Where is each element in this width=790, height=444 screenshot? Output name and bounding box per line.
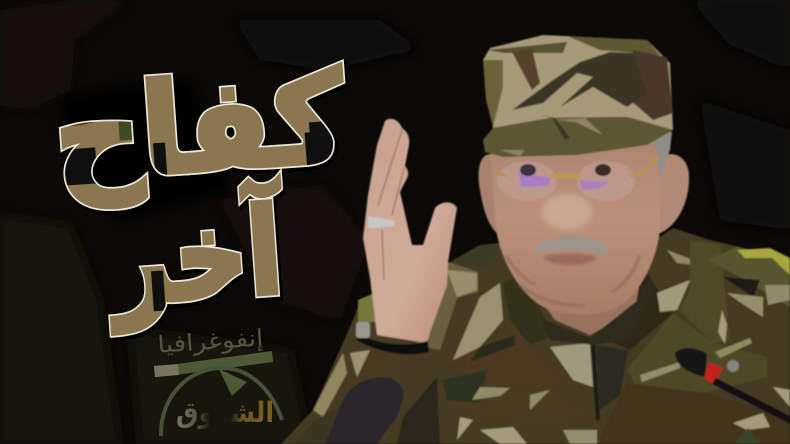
gray hair xyxy=(654,130,672,178)
epaulette embroidery right xyxy=(737,248,790,275)
logo arc xyxy=(161,368,282,436)
face wrinkles xyxy=(505,255,640,306)
portrait: general xyxy=(281,35,790,444)
glasses xyxy=(494,156,659,201)
face xyxy=(490,135,660,314)
subtitle: infographic label: إنفوغرافيا xyxy=(157,325,264,359)
jacket camouflage right xyxy=(597,273,673,350)
title line 1: كفاح xyxy=(49,45,349,211)
watch clasp xyxy=(356,322,370,338)
right ear xyxy=(658,154,689,234)
bracelet xyxy=(356,335,429,354)
microphone right xyxy=(675,348,790,424)
epaulette embroidery left xyxy=(358,294,376,322)
zipper xyxy=(590,340,600,420)
jacket camouflage left xyxy=(313,353,347,417)
cap camouflage xyxy=(483,60,503,127)
left ear xyxy=(479,154,500,236)
title line 1: كفاح xyxy=(52,48,351,214)
title line 2: آخر xyxy=(103,177,289,333)
ring xyxy=(368,216,395,228)
undershirt xyxy=(550,343,593,387)
microphone left xyxy=(325,377,403,444)
logo arrow xyxy=(219,369,247,396)
logo bar xyxy=(154,351,273,377)
hand xyxy=(356,119,457,354)
logo: newspaper watermark xyxy=(154,351,282,436)
neck xyxy=(520,250,645,335)
uniform jacket xyxy=(281,228,790,444)
mustache xyxy=(533,236,607,256)
logo wordmark: الشروق xyxy=(176,396,274,429)
title line 1: كفاح xyxy=(49,45,349,211)
finger lines xyxy=(378,130,404,280)
cap xyxy=(483,35,673,157)
title line 2: آخر xyxy=(103,177,289,333)
title line 2: آخر xyxy=(105,180,291,336)
nose xyxy=(542,194,592,230)
title: main heading xyxy=(49,45,351,336)
mouth xyxy=(543,253,597,265)
